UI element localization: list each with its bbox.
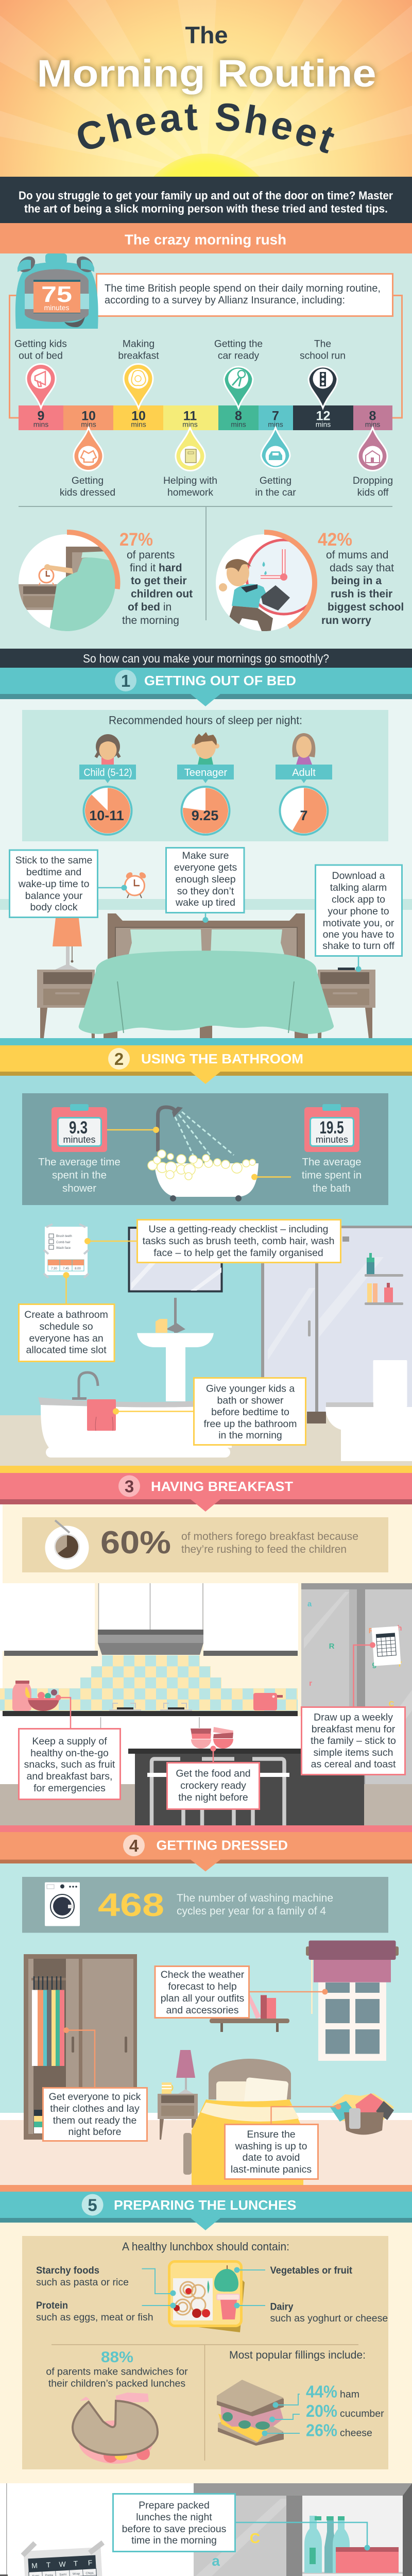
heading: 4 getting dressed: 4 xyxy=(129,1836,139,1855)
heading: 5 preparing the lunches: PREPARING THE LUNCHES xyxy=(114,2197,297,2213)
timeline labels below: Getting xyxy=(260,476,291,486)
timeline labels above: The xyxy=(314,339,331,349)
stat: 27% of parents: in xyxy=(163,601,171,613)
callout: breakfast menu: breakfast menu for xyxy=(312,1724,396,1735)
label: starchy foods: Starchy foods xyxy=(36,2265,99,2276)
stat: 26% cheese xyxy=(306,2420,372,2440)
illustration: lunch menu plan: T xyxy=(46,2561,51,2569)
intro band xyxy=(0,177,412,223)
icon: briefcase xyxy=(261,585,290,611)
illustration: stacked bowls xyxy=(191,1727,233,1749)
callout: pick clothes: their clothes and lay xyxy=(50,2103,140,2114)
illustration: kitchen units xyxy=(0,1583,301,1784)
heading: 5 preparing the lunches xyxy=(0,2192,412,2230)
timeline labels above: Getting kids xyxy=(14,339,67,349)
nightstand left xyxy=(37,970,95,1038)
timeline labels above: Getting the xyxy=(214,339,263,349)
callout: talking alarm clock xyxy=(315,865,402,956)
timeline bar with minutes: 10 xyxy=(131,409,146,423)
stat: 42% of mums and dads xyxy=(318,530,404,626)
callout: time spent: The time British people spend on their daily morning routine, xyxy=(105,283,381,294)
chart: adult clock 7 xyxy=(280,787,328,835)
illustration: shower over bubble bath xyxy=(148,1107,259,1201)
caption: shower: The average time xyxy=(38,1156,121,1168)
stat: 20% cucumber: cucumber xyxy=(340,2408,384,2419)
illustration: wardrobe with clothes xyxy=(24,1954,137,2140)
callout: healthy snacks: healthy on-the-go xyxy=(30,1748,109,1759)
icon: bath timer: 19.5 xyxy=(319,1118,344,1138)
icon: washing machine xyxy=(45,1883,80,1926)
callout: getting-ready checklist xyxy=(137,1220,341,1262)
callout: weather forecast: Check the weather xyxy=(161,1969,245,1980)
timeline bar with minutes: mins xyxy=(33,420,48,429)
label: child (5-12) xyxy=(79,765,136,783)
stat: 88% of parents: 88% xyxy=(101,2349,133,2366)
icon: calendar xyxy=(371,1626,401,1666)
icon: drop jumper xyxy=(74,428,103,471)
heading: 5 preparing the lunches: 5 xyxy=(88,2196,97,2215)
illustration: lunch menu plan: Wrap xyxy=(73,2572,80,2576)
heading: 1 getting out of bed xyxy=(0,668,412,706)
panel: section 2 using the bathroom xyxy=(0,1045,412,1473)
timeline labels below: Getting xyxy=(72,476,104,486)
panel: 60% of mothers: of mothers forego breakfast because xyxy=(181,1530,358,1543)
icon: ringing alarm clock xyxy=(39,564,73,585)
illustration: lunch menu plan: F xyxy=(88,2558,93,2567)
callout: prepare packed lunches: Prepare packed xyxy=(139,2500,210,2511)
callout: bathroom schedule: schedule so xyxy=(40,1321,93,1332)
callout: bathroom schedule xyxy=(19,1304,114,1361)
icon: child face xyxy=(96,734,120,765)
illustration: laundry basket xyxy=(330,2093,394,2135)
callout: talking alarm clock: your phone to xyxy=(328,906,389,917)
icon: toaster xyxy=(253,1693,283,1710)
illustration: lunch menu plan: M xyxy=(31,2561,38,2570)
label: dairy: such as yoghurt or cheese xyxy=(270,2313,388,2324)
callout: same bedtime: balance your xyxy=(25,890,83,902)
timeline labels below: Helping with xyxy=(163,476,217,486)
timeline labels below: kids off xyxy=(357,487,389,498)
callout: healthy snacks: snacks, such as fruit xyxy=(24,1759,115,1770)
stat: 42% of mums and dads: dads say that xyxy=(330,562,394,574)
illustration: fridge with magnets: C xyxy=(389,1700,394,1708)
panel: section 3 having breakfast xyxy=(0,1473,412,1832)
panel: bathroom timings xyxy=(22,1093,388,1205)
callout: enough sleep: enough sleep xyxy=(175,874,236,885)
callout: pick clothes: night before xyxy=(68,2126,122,2138)
icon: drop car xyxy=(261,428,290,468)
icon: bath timer xyxy=(304,1104,359,1152)
icon: coffee cup xyxy=(45,1520,89,1569)
callout: bath before bed: before bedtime to xyxy=(211,1406,289,1418)
illustration: fridge with magnets: r xyxy=(309,1679,312,1688)
panel: section 1 getting out of bed xyxy=(0,668,412,1045)
callout: enough sleep: so they don’t xyxy=(177,886,234,897)
icon: adult face xyxy=(292,733,316,765)
icon: pin megaphone xyxy=(26,364,56,408)
icon: runner head xyxy=(219,559,267,591)
stat: 26% cheese: cheese xyxy=(340,2428,372,2439)
callout: pick clothes: Get everyone to pick xyxy=(49,2091,141,2103)
panel: crazy morning rush xyxy=(0,253,412,649)
callout: breakfast menu: simple items such xyxy=(314,1747,393,1758)
label: starchy foods: such as pasta or rice xyxy=(36,2277,129,2288)
illustration: fridge with magnets: g xyxy=(372,1660,377,1669)
stat: 42% of mums and dads: being in a xyxy=(331,575,382,587)
timeline bar with minutes: 8 xyxy=(235,409,242,423)
illustration: alarm clock in bed xyxy=(15,532,118,634)
callout: bathroom schedule: Create a bathroom xyxy=(24,1309,108,1320)
panel: healthy lunchbox xyxy=(22,2236,388,2469)
timeline bar with minutes: 8 xyxy=(369,409,376,423)
callout: washing up to date: date to avoid xyxy=(243,2152,300,2163)
callout: bath before bed: Give younger kids a xyxy=(206,1383,295,1394)
heading: 3 having breakfast xyxy=(0,1473,412,1512)
icon: stopwatch 75 minutes: minutes xyxy=(44,303,70,312)
icon: stopwatch 75 minutes xyxy=(15,253,98,329)
callout: talking alarm clock: clock app to xyxy=(332,894,385,905)
illustration: fridge with magnets: a xyxy=(307,1600,312,1608)
illustration: shower cubicle xyxy=(261,1226,412,1423)
panel: 60% of mothers xyxy=(22,1517,388,1572)
illustration: toilet xyxy=(325,1360,412,1461)
illustration: checklist and schedule xyxy=(44,1224,89,1278)
timeline bar with minutes: 10 xyxy=(81,409,96,423)
timeline bar with minutes xyxy=(19,405,392,430)
heading: 1 getting out of bed: GETTING OUT OF BED xyxy=(144,673,296,688)
illustration: mirror xyxy=(129,1228,221,1291)
orange frame xyxy=(9,296,402,418)
panel: section 4 getting dressed xyxy=(0,1832,412,2192)
label: child (5-12): Child (5-12) xyxy=(83,767,132,778)
intro text: the art of being a slick morning person with these tried and tested tips. xyxy=(24,202,388,215)
callout: talking alarm clock: Download a xyxy=(332,870,385,882)
timeline bar with minutes: 9 xyxy=(38,409,44,423)
label: protein: Protein xyxy=(36,2300,68,2311)
callout: talking alarm clock: motivate you, or xyxy=(323,918,394,929)
callout: washing up to date: Ensure the xyxy=(247,2129,296,2140)
panel: healthy lunchbox: A healthy lunchbox should contain: xyxy=(122,2240,289,2253)
bed blanket xyxy=(79,951,334,1034)
icon: pin car keys xyxy=(224,367,253,408)
illustration: rushing man and clock xyxy=(216,532,321,634)
illustration: wall shelf with books xyxy=(210,1994,289,2032)
stat: 44% ham: 44% xyxy=(306,2382,337,2401)
heading: 2 using the bathroom: USING THE BATHROOM xyxy=(141,1051,303,1066)
panel: 468 washing cycles: The number of washing machine xyxy=(177,1892,333,1904)
heading: 1 getting out of bed: 1 xyxy=(121,671,130,690)
icon: drop book xyxy=(176,428,205,471)
callout: enough sleep: Make sure xyxy=(182,850,229,861)
title: Morning Routine: Morning Routine xyxy=(37,52,376,95)
stat: 88% of parents: their children’s packed lunches xyxy=(48,2378,185,2389)
timeline bar with minutes: mins xyxy=(316,420,331,429)
stat: 42% of mums and dads: 42% xyxy=(318,530,352,550)
illustration: fridge with magnets: R xyxy=(329,1642,335,1651)
callout: bath before bed: in the morning xyxy=(218,1430,282,1441)
chart: teenager clock 9.25: 9.25 xyxy=(192,808,218,823)
label: adult xyxy=(276,765,332,783)
timeline bar with minutes: mins xyxy=(231,420,246,429)
icon: pin traffic light xyxy=(308,367,337,408)
callout: enough sleep: wake up tired xyxy=(175,897,235,908)
illustration: checklist and schedule: 7.45 xyxy=(63,1267,69,1270)
callout: bath before bed: free up the bathroom xyxy=(203,1418,297,1430)
callout: bath before bed xyxy=(194,1378,306,1445)
callout: getting-ready checklist: face – to help get the family organised xyxy=(153,1247,323,1259)
illustration: jar and fruit bowl xyxy=(12,1681,59,1711)
icon: phone on nightstand xyxy=(338,968,355,970)
stat: 42% of mums and dads: of mums and xyxy=(326,549,388,561)
chart: child clock 10-11 xyxy=(83,787,132,835)
chart: child clock 10-11: 10-11 xyxy=(89,808,124,823)
label: protein: such as eggs, meat or fish xyxy=(36,2312,153,2323)
timeline bar with minutes: mins xyxy=(182,420,198,429)
illustration: fridge with magnets: R xyxy=(369,1626,374,1635)
callout: enough sleep: everyone gets xyxy=(174,862,237,873)
icon: lamp xyxy=(53,918,82,970)
illustration: bed with yellow blanket xyxy=(183,2059,303,2185)
icon: lunchbox xyxy=(169,2262,245,2332)
callout: washing up to date: last-minute panics xyxy=(231,2164,312,2175)
stat: 27% of parents: to get their xyxy=(131,575,186,587)
icon: shower timer: minutes xyxy=(63,1134,96,1145)
label: teenager xyxy=(177,765,234,783)
callout: healthy snacks: for emergencies xyxy=(33,1783,106,1794)
panel: 60% of mothers: 60% xyxy=(100,1525,171,1561)
illustration: lunch menu plan xyxy=(20,2538,106,2576)
timeline labels above: breakfast xyxy=(118,350,159,362)
icon: shower timer xyxy=(52,1104,107,1152)
illustration: basin xyxy=(137,1298,214,1401)
illustration: lamp, mug and nightstand xyxy=(158,2050,198,2140)
callout: same bedtime: body clock xyxy=(30,902,78,913)
callout: enough sleep xyxy=(166,848,244,913)
stat: 20% cucumber: 20% xyxy=(306,2401,337,2420)
stat: 26% cheese: 26% xyxy=(306,2420,337,2440)
timeline labels below xyxy=(60,476,393,498)
callout: same bedtime xyxy=(9,850,98,917)
stat: 88% of parents xyxy=(46,2349,188,2389)
callout: prepare packed lunches: lunches the night xyxy=(136,2512,212,2523)
timeline bar with minutes: mins xyxy=(131,420,146,429)
callout: getting-ready checklist: Use a getting-ready checklist – including xyxy=(148,1224,329,1235)
illustration: open fridge xyxy=(194,2483,412,2576)
illustration: lunch menu plan: T xyxy=(73,2559,78,2568)
icon: pin fried egg xyxy=(124,364,153,408)
callout: pick clothes: them out ready the xyxy=(53,2115,136,2126)
timeline bar with minutes: 11 xyxy=(183,409,197,423)
panel: 468 washing cycles xyxy=(22,1877,388,1933)
panel: recommended sleep hours: Recommended hours of sleep per night: xyxy=(109,714,302,726)
illustration: lunch menu plan: Chips xyxy=(85,2572,94,2575)
icon: stopwatch 75 minutes: 75 xyxy=(41,282,72,307)
fridge bottles and boxes xyxy=(302,2516,400,2576)
illustration: fridge with magnets: h xyxy=(397,1624,402,1633)
illustration: checklist and schedule: 7.30 xyxy=(51,1267,57,1270)
timeline bar with minutes: mins xyxy=(365,420,380,429)
stat: 88% of parents: of parents make sandwiches for xyxy=(46,2366,188,2377)
caption: shower: shower xyxy=(62,1182,96,1194)
panel: 468 washing cycles: 468 xyxy=(98,1887,164,1923)
callout: breakfast menu: as cereal and toast xyxy=(311,1759,396,1770)
illustration: checklist and schedule: 8.00 xyxy=(75,1267,81,1270)
timeline labels below: in the car xyxy=(255,487,296,498)
caption: shower: spent in the xyxy=(52,1170,107,1181)
callout: food and crockery: Get the food and xyxy=(176,1768,251,1780)
callout: bathroom schedule: everyone has an xyxy=(29,1333,104,1344)
heading: 4 getting dressed: GETTING DRESSED xyxy=(157,1837,288,1853)
illustration: blind and rainy window xyxy=(306,1940,399,2061)
stat: 20% cucumber xyxy=(306,2401,384,2420)
intro text: Do you struggle to get your family up and out of the door on time? Master xyxy=(19,189,393,202)
illustration: checklist and schedule: Brush teeth xyxy=(56,1235,72,1238)
icon: drop school xyxy=(358,428,387,471)
timeline labels below: kids dressed xyxy=(60,487,115,498)
panel: section 5 preparing the lunches xyxy=(0,2192,412,2576)
illustration: shelves and bottles xyxy=(365,1253,403,1305)
callout: breakfast menu: the family – stick to xyxy=(311,1735,396,1747)
callout: prepare packed lunches: before to save precious xyxy=(122,2523,227,2535)
callout: weather forecast: plan all your outfits xyxy=(161,1993,245,2004)
stat: 27% of parents xyxy=(119,530,193,626)
callout: prepare packed lunches xyxy=(113,2494,235,2551)
callout: time spent: according to a survey by Allianz Insurance, including: xyxy=(105,295,345,306)
timeline bar with minutes: mins xyxy=(268,420,283,429)
timeline labels above xyxy=(14,339,346,362)
timeline labels below: homework xyxy=(167,487,213,498)
illustration: kitchen wall and cupboard xyxy=(0,2483,412,2576)
chart: teenager clock 9.25 xyxy=(181,787,230,835)
stat: 42% of mums and dads: rush is their xyxy=(331,588,392,600)
caption: bath: time spent in xyxy=(302,1170,362,1181)
title: Cheat Sheet: Cheat Sheet xyxy=(78,103,335,154)
timeline bar with minutes: 12 xyxy=(316,409,330,423)
callout: breakfast menu: Draw up a weekly xyxy=(314,1711,393,1723)
illustration: fridge with magnets xyxy=(301,1583,412,1784)
label: dairy: Dairy xyxy=(270,2301,294,2313)
fridge letter magnets xyxy=(205,2530,271,2576)
illustration: round sandwich xyxy=(73,2393,158,2464)
icon: alarm clock xyxy=(125,871,147,898)
panel: 468 washing cycles: cycles per year for a family of 4 xyxy=(177,1905,326,1917)
callout: food and crockery: the night before xyxy=(178,1792,248,1803)
heading: 4 getting dressed xyxy=(0,1832,412,1871)
chart: adult clock 7: 7 xyxy=(300,808,308,823)
callout: same bedtime: Stick to the same xyxy=(15,855,92,866)
panel: 60% of mothers: they’re rushing to feed the children xyxy=(181,1543,347,1555)
callout: washing up to date xyxy=(225,2125,318,2179)
timeline bar with minutes: mins xyxy=(81,420,96,429)
callout: same bedtime: wake-up time to xyxy=(18,878,90,890)
callout: time spent xyxy=(97,274,392,316)
stat: 27% of parents: hard xyxy=(159,562,182,574)
callout: prepare packed lunches: time in the morning xyxy=(131,2535,217,2546)
stat: 27% of parents: find it xyxy=(130,562,159,574)
label: vegetables or fruit: Vegetables or fruit xyxy=(270,2265,352,2276)
label: adult: Adult xyxy=(292,767,316,778)
caption: bath: The average xyxy=(302,1156,362,1168)
stat: 42% of mums and dads: run worry xyxy=(321,615,371,626)
callout: getting-ready checklist: tasks such as brush teeth, comb hair, wash xyxy=(143,1235,334,1247)
callout: talking alarm clock: talking alarm xyxy=(330,882,387,893)
heading: 3 having breakfast: HAVING BREAKFAST xyxy=(151,1479,293,1494)
timeline labels above: Making xyxy=(123,339,154,349)
stat: 44% ham xyxy=(306,2382,359,2401)
callout: talking alarm clock: shake to turn off xyxy=(322,940,394,952)
stat: 27% of parents: of parents xyxy=(127,549,175,561)
illustration: fridge with magnets: Y xyxy=(397,1660,402,1669)
callout: bath before bed: bath or shower xyxy=(217,1395,284,1406)
stat: 27% of parents: 27% xyxy=(119,530,153,550)
header: sunrise title xyxy=(0,0,412,177)
heading: 2 using the bathroom xyxy=(0,1045,412,1084)
callout: same bedtime: bedtime and xyxy=(26,867,81,878)
callout: bathroom schedule: allocated time slot xyxy=(26,1345,107,1356)
illustration: bath and towel xyxy=(38,1372,232,1458)
illustration: checklist and schedule: Wash face xyxy=(56,1247,71,1250)
illustration: lunch menu plan: W xyxy=(59,2560,66,2568)
icon: rising sun xyxy=(153,154,260,177)
timeline labels above: car ready xyxy=(218,350,260,362)
stat: 27% of parents: the morning xyxy=(122,615,179,626)
text: most popular fillings: Most popular fillings include: xyxy=(229,2349,366,2361)
label: teenager: Teenager xyxy=(184,767,228,778)
icon: teenager face xyxy=(192,732,219,765)
stat: 44% ham: ham xyxy=(340,2388,359,2400)
callout: weather forecast: forecast to help xyxy=(168,1981,237,1992)
illustration: bedroom xyxy=(37,871,375,1038)
timeline labels above: out of bed xyxy=(19,350,63,362)
band: so how can you make your mornings go smoothly xyxy=(0,649,412,668)
panel: recommended sleep hours xyxy=(22,710,388,841)
callout: washing up to date: washing is up to xyxy=(235,2141,307,2152)
icon: shower timer: 9.3 xyxy=(69,1118,88,1138)
fridge letter magnets: a xyxy=(212,2553,220,2569)
caption: bath: the bath xyxy=(313,1182,351,1194)
callout: healthy snacks: and breakfast bars, xyxy=(27,1771,112,1782)
timeline labels above: school run xyxy=(300,350,346,362)
timeline bar with minutes: 7 xyxy=(272,409,279,423)
callout: weather forecast: and accessories xyxy=(166,2005,239,2016)
callout: food and crockery xyxy=(167,1763,260,1809)
stat: 27% of parents: of bed xyxy=(128,601,163,613)
stat: 27% of parents: children out xyxy=(131,588,193,600)
callout: pick clothes xyxy=(43,2088,147,2141)
callout: weather forecast xyxy=(155,1966,249,2018)
heading: 2 using the bathroom: 2 xyxy=(114,1049,124,1069)
nightstand right xyxy=(318,970,375,1038)
illustration: island and stools xyxy=(128,1749,364,1825)
timeline labels below: Dropping xyxy=(353,476,393,486)
heading: the crazy morning rush xyxy=(0,223,412,253)
callout: healthy snacks: Keep a supply of xyxy=(32,1736,107,1747)
callout: talking alarm clock: one you have to xyxy=(323,929,394,940)
illustration: layered sandwich xyxy=(217,2380,284,2446)
callout: food and crockery: crockery ready xyxy=(180,1780,246,1791)
band: so how can you make your mornings go smoothly: So how can you make your mornings go smoothly? xyxy=(83,652,329,665)
illustration: checklist and schedule: Comb hair xyxy=(56,1241,71,1244)
stat: 42% of mums and dads: biggest school xyxy=(328,601,404,613)
callout: breakfast menu xyxy=(302,1707,405,1774)
icon: bath timer: minutes xyxy=(316,1134,348,1145)
heading: the crazy morning rush: The crazy morning rush xyxy=(125,232,286,247)
heading: 3 having breakfast: 3 xyxy=(125,1477,134,1496)
title: The: The xyxy=(185,22,228,48)
fridge letter magnets: C xyxy=(250,2530,260,2546)
callout: healthy snacks xyxy=(19,1729,121,1799)
